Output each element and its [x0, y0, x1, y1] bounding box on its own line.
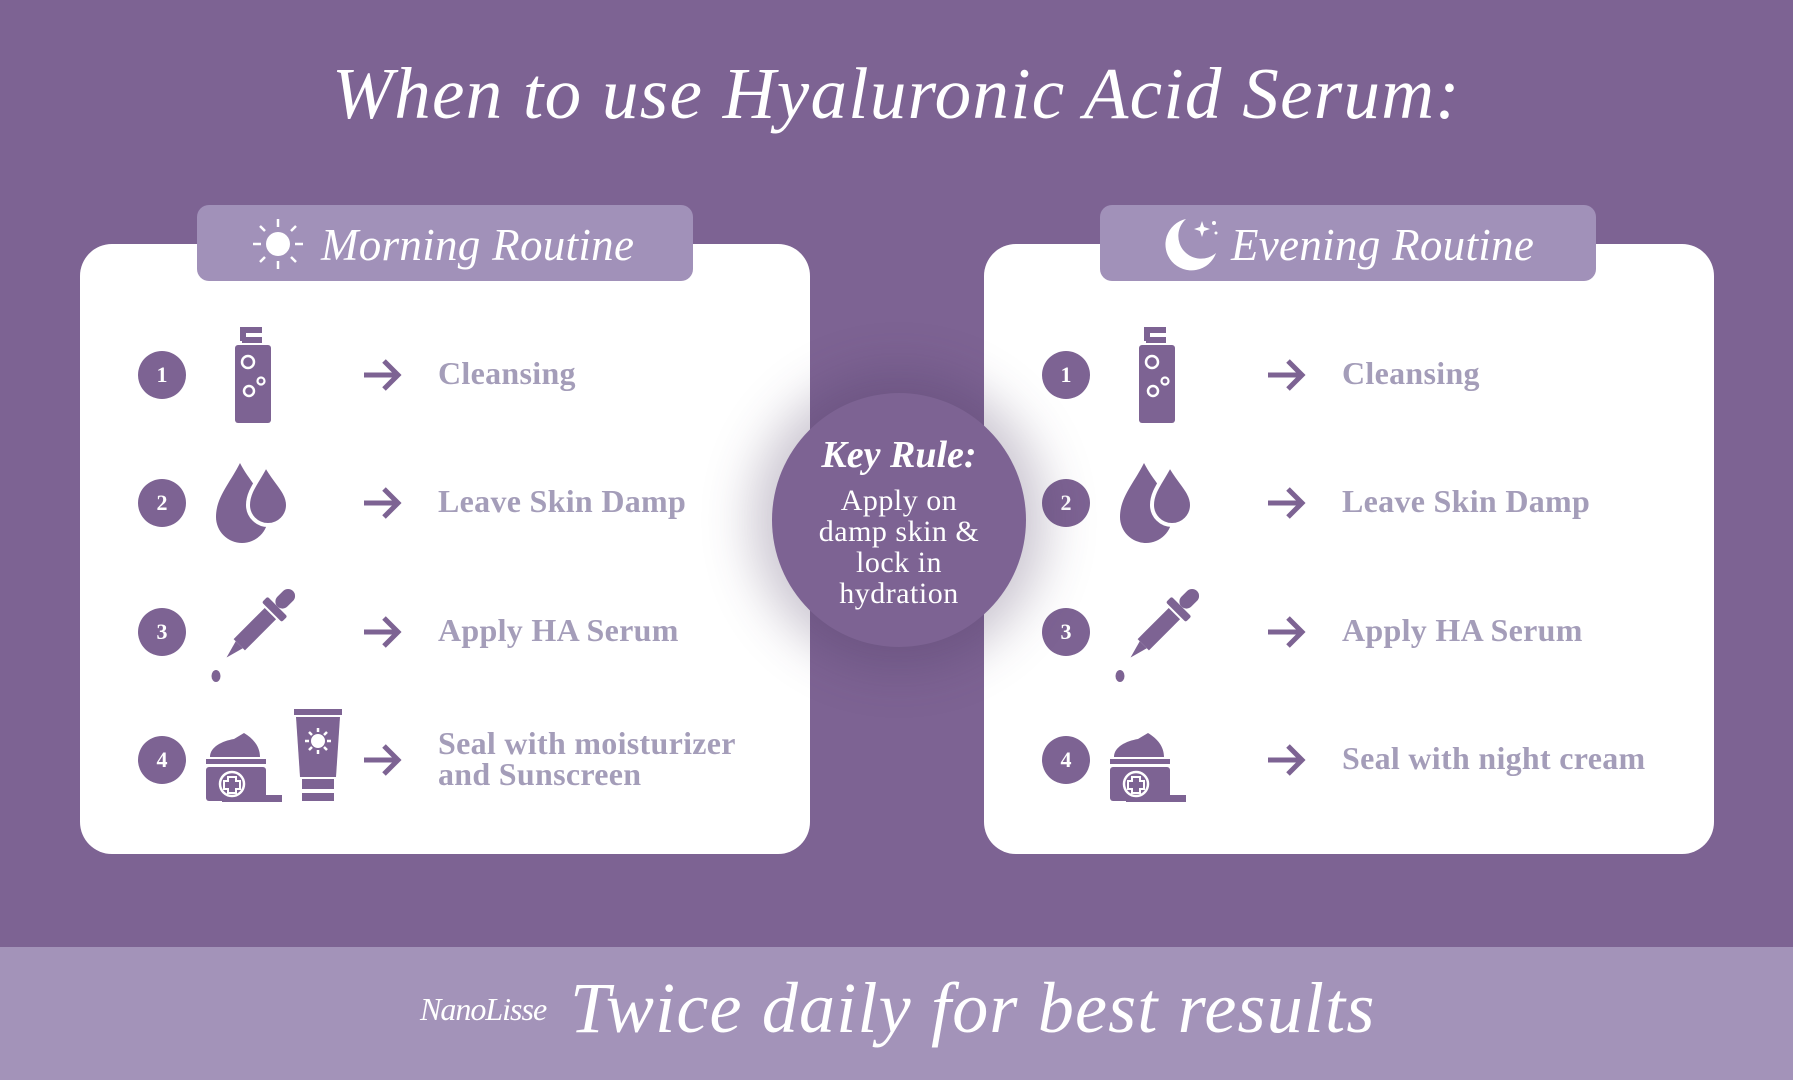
- step 2 evening: [1042, 463, 1590, 543]
- step 1 morning: 1: [156, 362, 168, 387]
- step 4 morning: and Sunscreen: [438, 756, 641, 792]
- step 3 evening: Apply HA Serum: [1342, 612, 1583, 648]
- step 3 morning: Apply HA Serum: [438, 612, 679, 648]
- icon: cream jar and sunscreen: [206, 709, 342, 802]
- tab: evening routine header: Evening Routine: [1231, 220, 1534, 270]
- step 4 morning: Seal with moisturizer: [438, 725, 736, 761]
- step 2 morning: Leave Skin Damp: [438, 483, 686, 519]
- tab: evening routine header: [1100, 205, 1596, 281]
- callout: key rule circle: [772, 393, 1026, 647]
- tagline: Twice daily for best results: [570, 968, 1376, 1048]
- step 1 morning: Cleansing: [438, 355, 576, 391]
- step 3 morning: 3: [156, 619, 168, 644]
- icon: cleanser bottle: [235, 327, 271, 423]
- step 2 evening: Leave Skin Damp: [1342, 483, 1590, 519]
- step 4 morning: [138, 709, 736, 802]
- logo: NanoLisse: NanoLisse: [420, 991, 546, 1027]
- step 1 evening: 1: [1060, 362, 1072, 387]
- footer band: [0, 947, 1793, 1080]
- icon: sun: [253, 219, 303, 269]
- step 1 evening: Cleansing: [1342, 355, 1480, 391]
- callout: key rule circle: Apply on: [841, 484, 957, 517]
- step 4 evening: 4: [1060, 747, 1072, 772]
- step 1 morning: [138, 327, 576, 423]
- tab: morning routine header: [197, 205, 693, 281]
- step 2 morning: [138, 463, 686, 543]
- step 2 evening: 2: [1060, 490, 1072, 515]
- icon: water drops: [216, 463, 286, 543]
- title: When to use Hyaluronic Acid Serum:: [332, 53, 1461, 134]
- tab: morning routine header: Morning Routine: [321, 220, 634, 270]
- step 3 evening: [1042, 589, 1583, 682]
- callout: key rule circle: Key Rule:: [821, 434, 977, 476]
- step 4 evening: [1042, 733, 1645, 802]
- arrow: [364, 359, 402, 391]
- callout: key rule circle: damp skin &: [819, 515, 979, 548]
- step 3 morning: [138, 589, 679, 682]
- step 4 morning: 4: [156, 747, 168, 772]
- step 4 evening: Seal with night cream: [1342, 740, 1645, 776]
- step 1 evening: [1042, 327, 1480, 423]
- panel: evening routine: [984, 244, 1714, 854]
- icon: dropper: [212, 589, 296, 682]
- step 2 morning: 2: [156, 490, 168, 515]
- step 3 evening: 3: [1060, 619, 1072, 644]
- panel: morning routine: [80, 244, 810, 854]
- callout: key rule circle: hydration: [839, 577, 959, 610]
- callout: key rule circle: lock in: [856, 546, 942, 579]
- icon: moon: [1165, 219, 1218, 270]
